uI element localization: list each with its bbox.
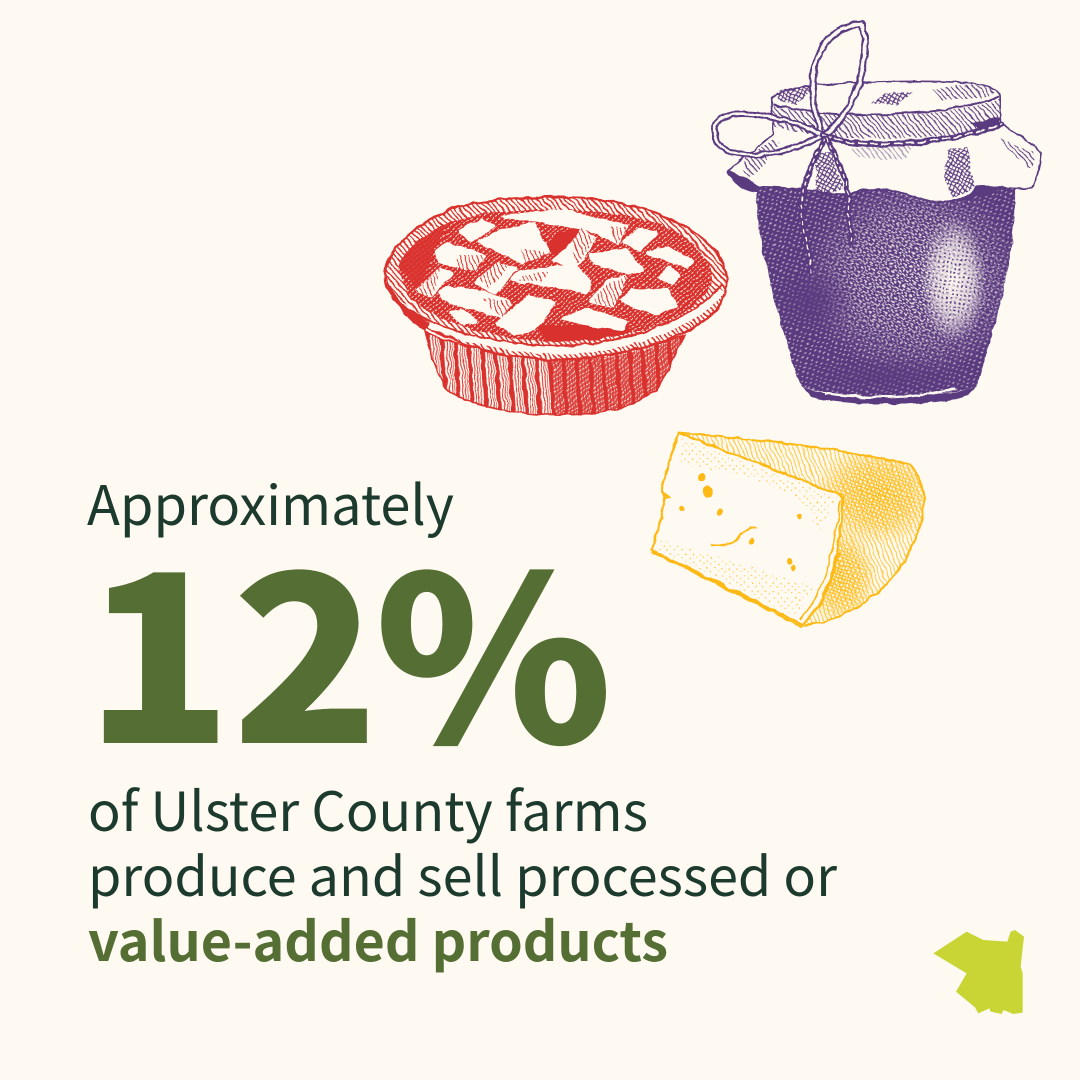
icon: cheese wedge illustration bbox=[652, 430, 933, 630]
cheese rind bbox=[673, 430, 933, 630]
jar base bbox=[800, 387, 977, 404]
cheese cut face bbox=[652, 433, 842, 626]
icon: lattice pie illustration bbox=[382, 195, 732, 415]
icon: Ulster County map shape bbox=[933, 930, 1024, 1014]
twine bow bbox=[714, 23, 1002, 273]
pie dish bbox=[425, 332, 685, 415]
lattice strips bbox=[418, 211, 692, 332]
line: value-added products: value-added products bbox=[88, 898, 668, 977]
stat: 12 percent: 12% bbox=[85, 477, 613, 809]
jar body bbox=[727, 170, 1027, 403]
line: of Ulster County farms: of Ulster County farms bbox=[88, 768, 648, 847]
cheese holes bbox=[679, 474, 802, 571]
text: Approximately: Approximately bbox=[87, 462, 454, 541]
line: produce and sell processed or: produce and sell processed or bbox=[88, 833, 838, 912]
pie filling bbox=[398, 208, 712, 342]
icon: jam jar illustration bbox=[714, 23, 1042, 404]
cloth cover bbox=[728, 81, 1042, 202]
text: description bbox=[88, 768, 838, 977]
lattice shading bbox=[415, 227, 628, 318]
crust outer edge bbox=[382, 195, 732, 365]
